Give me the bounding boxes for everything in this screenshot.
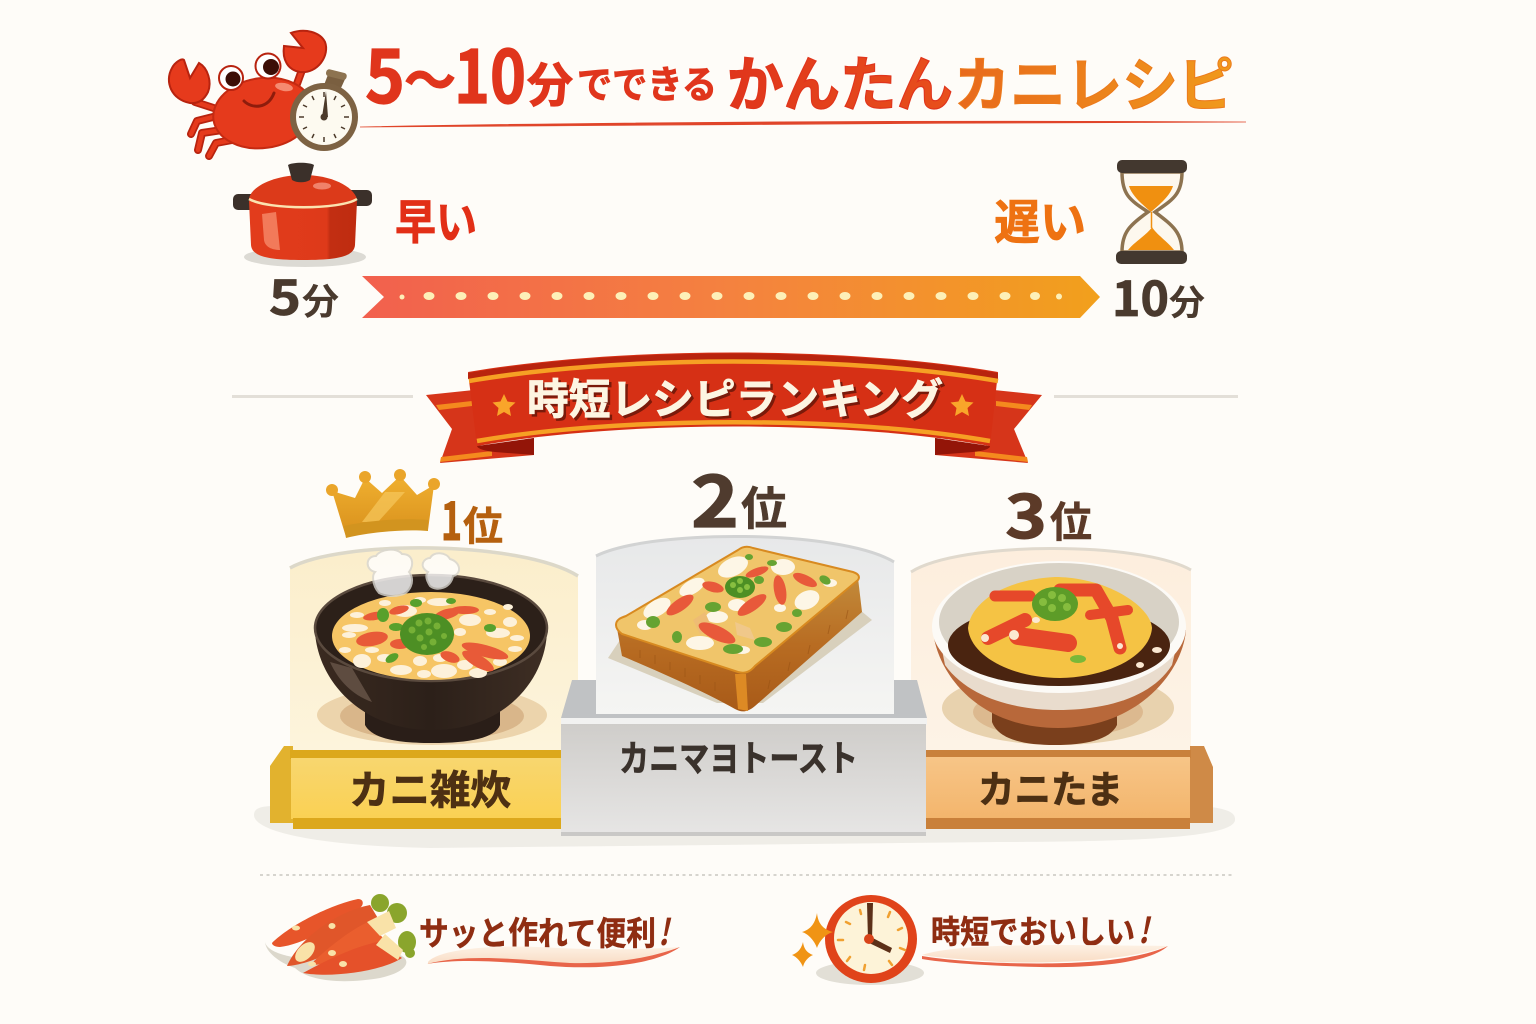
podium: first place xyxy=(270,746,562,829)
dish: crab porridge xyxy=(315,575,547,745)
icon: crab with stopwatch xyxy=(169,31,358,156)
title: 〜 xyxy=(404,37,456,118)
label: 5 minutes: 5 xyxy=(269,259,301,329)
icon: crab sticks xyxy=(265,894,416,981)
rank label 3 unit: 位 xyxy=(1050,489,1092,550)
icon: crown xyxy=(326,469,440,538)
panel: rank 3 backdrop xyxy=(911,548,1191,750)
rank label 2: 2 xyxy=(691,447,739,548)
label: 10 minutes unit: 分 xyxy=(1169,275,1205,326)
podium: second place xyxy=(561,536,927,836)
dish: crab mayo toast xyxy=(608,547,872,711)
note: quick and handy xyxy=(265,894,680,981)
title: 分 xyxy=(527,47,573,116)
dish: crab omelette bowl xyxy=(932,561,1186,745)
label: 5 minutes unit: 分 xyxy=(302,273,339,325)
swoosh xyxy=(922,945,1168,962)
rank 3 xyxy=(911,469,1213,829)
title underline xyxy=(360,121,1246,127)
ranking ribbon banner xyxy=(426,352,1042,463)
title: でできる xyxy=(577,54,717,109)
title: かんたん xyxy=(727,37,953,124)
label: slow: 遅い xyxy=(994,184,1086,253)
title: 10 xyxy=(454,19,526,125)
title: 5 xyxy=(365,19,405,125)
swoosh xyxy=(428,946,680,964)
podium: third place xyxy=(925,746,1213,829)
rank 1 xyxy=(270,469,578,829)
banner title: 時短レシピランキング xyxy=(530,368,946,430)
time arrow xyxy=(362,276,1100,318)
header xyxy=(169,19,1246,156)
banner title text: 時短レシピランキング xyxy=(527,366,943,427)
steam xyxy=(368,550,459,596)
rank label 3: 3 xyxy=(1005,469,1047,556)
star right xyxy=(950,394,974,416)
icon: clock with sparkles xyxy=(792,895,924,985)
dish name: カニ雑炊 xyxy=(349,758,511,816)
star left xyxy=(492,394,516,416)
speed scale xyxy=(233,160,1205,330)
dish name: カニたま xyxy=(978,759,1123,814)
podium ground shadow xyxy=(254,806,1235,848)
title xyxy=(365,19,1234,125)
label: fast: 早い xyxy=(395,184,477,253)
icon: hourglass xyxy=(1116,160,1187,264)
note text: サッと作れて便利 xyxy=(419,907,656,955)
label: 10 minutes: 10 xyxy=(1112,260,1169,330)
dish name: カニマヨトースト xyxy=(619,730,858,782)
rank label 1 unit: 位 xyxy=(463,494,503,552)
panel: rank 1 backdrop xyxy=(290,546,578,750)
title: カニレシピ xyxy=(954,38,1234,123)
rank label 1: 1 xyxy=(441,480,462,555)
exclamation mark: ! xyxy=(1138,903,1152,954)
icon: red pot xyxy=(233,163,372,267)
rank 2 xyxy=(561,447,927,836)
note: saves time and tasty xyxy=(792,895,1168,985)
rank label 2 unit: 位 xyxy=(741,473,787,539)
note text: 時短でおいしい xyxy=(931,907,1135,953)
exclamation mark: ! xyxy=(658,904,672,956)
